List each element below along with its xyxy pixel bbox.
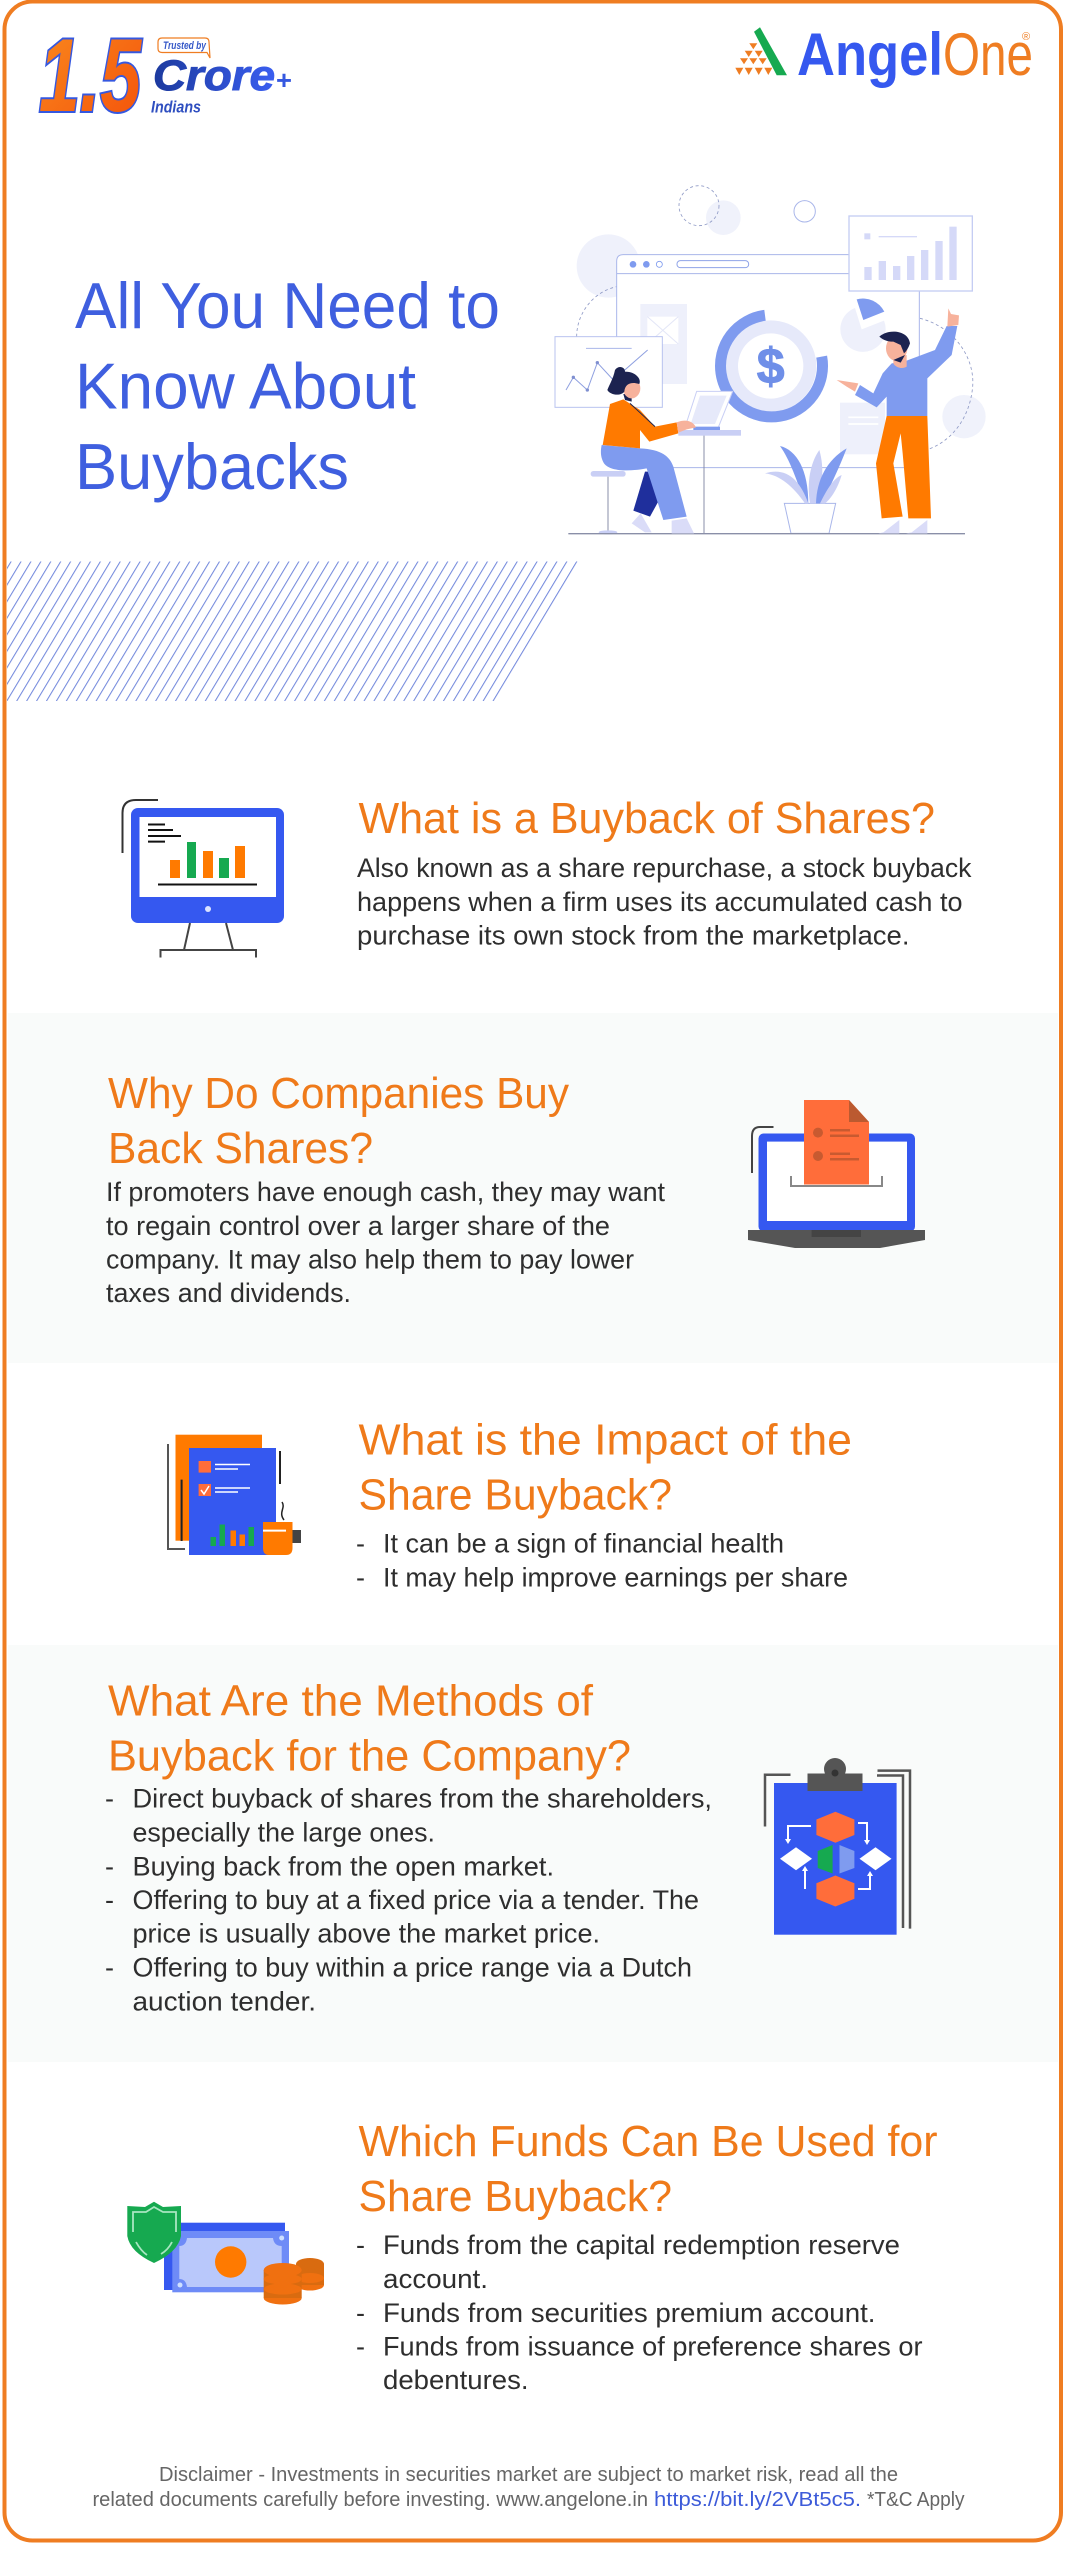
illustration: two people with financial dashboard: $ bbox=[757, 338, 785, 394]
bullet list: - bbox=[356, 2298, 365, 2328]
text block: Also known as a share repurchase, a stock buyback bbox=[357, 853, 972, 883]
title: All You Need to bbox=[75, 269, 500, 342]
heading: Back Shares? bbox=[108, 1124, 373, 1173]
heading bbox=[108, 1069, 569, 1173]
bullet list: Buying back from the open market. bbox=[132, 1852, 554, 1882]
disclaimer: *T&C Apply bbox=[867, 2489, 964, 2511]
bullet list: - bbox=[105, 1852, 114, 1882]
heading bbox=[108, 1676, 631, 1780]
title bbox=[75, 269, 500, 503]
title: Buybacks bbox=[75, 430, 349, 503]
bullet list: - bbox=[356, 2230, 365, 2260]
icon: clipboard with flowchart bbox=[765, 1758, 910, 1935]
bullet list: auction tender. bbox=[132, 1986, 316, 2016]
bullet list: Funds from issuance of preference shares or bbox=[383, 2332, 923, 2362]
bullet list bbox=[105, 1784, 712, 2016]
text block bbox=[106, 1177, 665, 1308]
text block: happens when a firm uses its accumulated cash to bbox=[357, 887, 963, 917]
logo: 1.5 Crore+ Indians: Indians bbox=[151, 98, 201, 116]
logo: 1.5 Crore+ Indians bbox=[39, 18, 292, 134]
panel: methods of buyback bbox=[105, 1676, 910, 2016]
logo: 1.5 Crore+ Indians: + bbox=[276, 65, 292, 95]
woman bbox=[633, 472, 660, 517]
heading: What is a Buyback of Shares? bbox=[358, 794, 935, 843]
logo: 1.5 Crore+ Indians: Trusted by bbox=[163, 40, 207, 52]
bullet list: Funds from the capital redemption reserve bbox=[383, 2230, 900, 2260]
text block: taxes and dividends. bbox=[106, 1278, 351, 1308]
bullet list: Funds from securities premium account. bbox=[383, 2298, 876, 2328]
heading: What Are the Methods of bbox=[108, 1676, 594, 1726]
heading: Share Buyback? bbox=[358, 2172, 672, 2221]
bullet list: Offering to buy at a fixed price via a tender. The bbox=[132, 1885, 699, 1915]
panel: why companies buy back background bbox=[8, 1013, 1058, 1363]
icon: monitor with chart bbox=[122, 800, 284, 958]
bullet list: Direct buyback of shares from the shareholders, bbox=[132, 1784, 712, 1814]
heading bbox=[358, 1416, 852, 1520]
icon: money with shield and coins bbox=[127, 2202, 324, 2304]
text block: to regain control over a larger share of the bbox=[106, 1211, 610, 1241]
logo: 1.5 Crore+ Indians: Crore bbox=[153, 52, 275, 100]
disclaimer bbox=[92, 2464, 964, 2511]
illustration: two people with financial dashboard bbox=[555, 186, 986, 534]
heading: Why Do Companies Buy bbox=[108, 1069, 569, 1118]
heading: Share Buyback? bbox=[358, 1470, 672, 1520]
panel: what is a buyback bbox=[122, 794, 972, 958]
logo: 1.5 Crore+ Indians: 1.5 bbox=[39, 18, 143, 134]
text block: If promoters have enough cash, they may want bbox=[106, 1177, 665, 1207]
logo: Angel One: One bbox=[943, 21, 1033, 88]
bullet list: especially the large ones. bbox=[132, 1818, 435, 1848]
heading: Which Funds Can Be Used for bbox=[358, 2117, 938, 2166]
panel: why do companies buy back shares bbox=[106, 1069, 925, 1308]
bullet list bbox=[356, 1528, 848, 1592]
icon: laptop with document bbox=[748, 1100, 925, 1248]
bullet list: debentures. bbox=[383, 2365, 528, 2395]
bullet list: - bbox=[356, 2332, 365, 2362]
text block bbox=[357, 853, 972, 950]
panel: methods of buyback background bbox=[8, 1645, 1058, 2062]
icon: documents with mug bbox=[168, 1435, 301, 1555]
heading: Buyback for the Company? bbox=[108, 1732, 631, 1780]
logo: Angel One bbox=[735, 21, 1033, 88]
panel: funds for share buyback bbox=[127, 2117, 938, 2395]
heading bbox=[358, 2117, 938, 2221]
decorative hatch band bbox=[7, 562, 578, 701]
man bbox=[878, 520, 899, 533]
logo: Angel One: ® bbox=[1022, 31, 1030, 43]
heading: What is the Impact of the bbox=[358, 1416, 852, 1464]
logo: Angel One: Angel bbox=[797, 21, 943, 88]
text block: purchase its own stock from the marketplace. bbox=[357, 920, 910, 950]
bullet list: It can be a sign of financial health bbox=[383, 1528, 784, 1558]
title: Know About bbox=[75, 350, 416, 422]
panel: impact of the share buyback bbox=[168, 1416, 852, 1592]
bullet list: - bbox=[356, 1528, 365, 1558]
bullet list: account. bbox=[383, 2264, 488, 2294]
text block: company. It may also help them to pay lower bbox=[106, 1244, 634, 1274]
bullet list: - bbox=[356, 1562, 365, 1592]
bullet list: - bbox=[105, 1784, 114, 1814]
disclaimer: Disclaimer - Investments in securities market are subject to market risk, read all the bbox=[159, 2464, 898, 2486]
bullet list: price is usually above the market price. bbox=[132, 1918, 600, 1948]
bullet list bbox=[356, 2230, 923, 2395]
disclaimer: https://bit.ly/2VBt5c5. bbox=[654, 2489, 861, 2511]
bullet list: - bbox=[105, 1952, 114, 1982]
disclaimer: related documents carefully before investing. www.angelone.in bbox=[92, 2489, 648, 2511]
bullet list: Offering to buy within a price range via a Dutch bbox=[132, 1952, 692, 1982]
bullet list: It may help improve earnings per share bbox=[383, 1562, 848, 1592]
bullet list: - bbox=[105, 1885, 114, 1915]
